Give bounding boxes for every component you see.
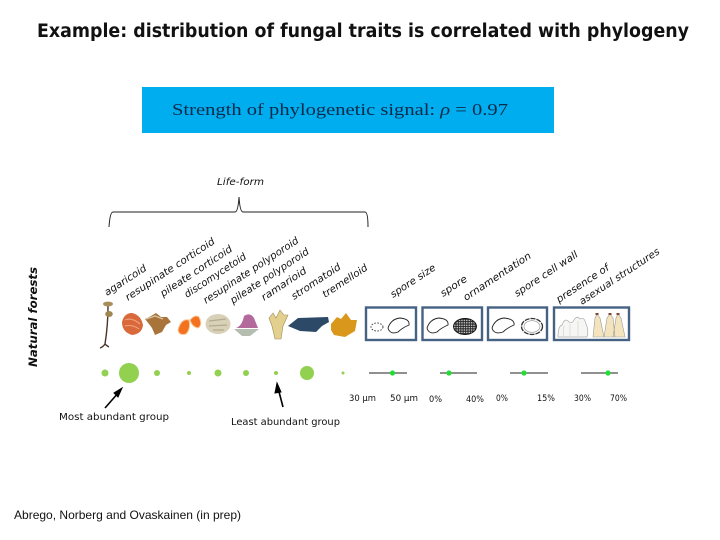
abundance circles — [102, 363, 344, 383]
trait value markers — [390, 370, 611, 376]
icons: fungi life-forms — [100, 302, 357, 348]
range values: 0% — [429, 395, 442, 405]
range values: 0% — [496, 394, 508, 404]
life-form labels: stromatoid — [290, 261, 344, 303]
icon: resupinate corticoid — [122, 313, 143, 335]
trait labels: asexual structures — [578, 246, 662, 308]
icon: ramarioid — [269, 310, 288, 339]
title: Example: distribution of fungal traits is correlated with phylogeny — [37, 21, 689, 42]
trait labels: spore size — [389, 263, 438, 301]
life-form labels: resupinate polyporoid — [202, 235, 302, 307]
heading: life-form: Life-form — [217, 177, 264, 188]
icon: pileate polyporoid — [234, 314, 259, 336]
trait labels — [389, 246, 662, 308]
range values: 30 µm — [349, 394, 376, 404]
life-form labels: discomycetoid — [183, 251, 249, 301]
life-form labels: resupinate corticoid — [124, 236, 218, 304]
life-form labels — [103, 235, 371, 307]
range values — [349, 394, 627, 405]
callout: phylogenetic signal strength: Strength of phylogenetic signal: ρ = 0.97 — [172, 100, 509, 119]
icon: agaricoid mushroom — [100, 302, 113, 348]
trait labels: presence of — [554, 262, 613, 306]
panel: spore size — [366, 308, 416, 340]
life-form labels: agaricoid — [103, 263, 149, 299]
range values: 30% — [574, 394, 591, 404]
life-form labels: tremelloid — [321, 262, 371, 301]
trait labels: spore cell wall — [513, 249, 581, 300]
icon: resupinate polyporoid — [206, 314, 230, 334]
citation: Abrego, Norberg and Ovaskainen (in prep) — [14, 508, 241, 522]
arrow: most abundant — [105, 388, 122, 408]
range values: 15% — [537, 394, 555, 404]
range values: 50 µm — [390, 394, 418, 404]
trait range lines — [369, 372, 618, 374]
panel: asexual structures — [554, 308, 629, 340]
life-form labels: pileate polyporoid — [228, 246, 312, 307]
trait labels: ornamentation — [462, 251, 534, 304]
axis label: natural forests: Natural forests — [26, 267, 40, 367]
arrow: least abundant — [275, 383, 283, 407]
range values: 40% — [466, 395, 484, 405]
annotation: least abundant group: Least abundant group — [231, 417, 340, 428]
annotation: most abundant group: Most abundant group — [59, 412, 169, 423]
range values: 70% — [610, 394, 627, 404]
icon: tremelloid — [331, 313, 357, 337]
icon: discomycetoid — [178, 316, 201, 334]
bracket: life-form group — [109, 197, 368, 227]
life-form labels: ramarioid — [260, 265, 310, 304]
icon: pileate corticoid — [145, 313, 171, 335]
trait labels: spore — [439, 274, 470, 300]
panel: spore ornamentation — [422, 308, 482, 340]
callout: phylogenetic signal strength — [142, 87, 554, 133]
life-form labels: pileate corticoid — [158, 244, 235, 300]
icon: stromatoid — [288, 317, 329, 332]
panel: spore cell wall — [488, 308, 547, 340]
